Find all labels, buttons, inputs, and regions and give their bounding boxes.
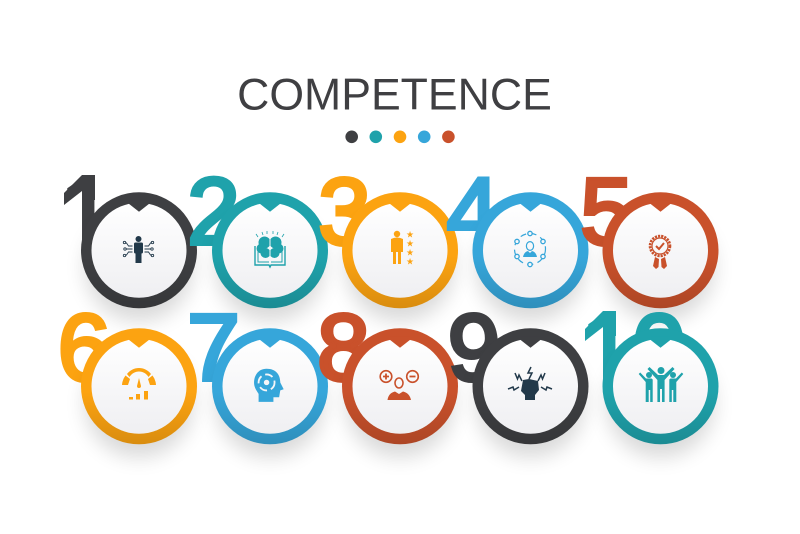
number 1: 1 [60,159,113,265]
icon: gauge [122,368,156,400]
item 10 [581,295,718,457]
number 3: 3 [318,159,371,265]
icon: person with stars: ★ [406,248,414,258]
item 3 [318,159,458,321]
item 8 [317,295,458,457]
ring 1 [81,192,197,321]
ring 4 [472,192,588,321]
item 1 [60,159,197,321]
item 7 [187,295,328,457]
ring 10 [602,328,718,457]
ring 5 [602,192,718,321]
ring 2 [212,192,328,321]
ring 8 [342,328,458,457]
number 8: 8 [317,295,370,401]
title dots [345,130,455,143]
number 6: 6 [58,295,110,401]
icon: network around person [514,231,546,267]
icon: person with stars: ★ [406,238,414,248]
number 10: 1 [581,295,634,401]
title: COMPETENCE [237,70,552,120]
icon: fist with lightning [508,367,552,400]
icon: head with cycle [254,369,284,402]
icon: brain and book [255,231,285,267]
number 4: 4 [447,159,499,265]
item 9 [448,295,588,457]
number 10 [585,311,682,378]
item 5 [580,159,718,321]
ring 3 [342,192,458,321]
number 9: 9 [448,295,500,401]
item 4 [447,159,588,321]
ring 9 [472,328,588,457]
item 2 [187,159,328,321]
icon: person with circuits [123,236,154,263]
icon: person with plus and minus [380,371,418,400]
icon: three people celebrating [639,367,683,402]
number 7: 7 [187,295,240,401]
number 10: 0 [633,295,685,401]
number 1 [64,175,95,240]
number 5: 5 [580,159,633,265]
icon: person with stars: ★ [406,256,414,266]
icon: person with stars: ★ [406,230,414,240]
item 6 [58,295,197,457]
ring 7 [212,328,328,457]
icon: award badge [650,236,670,269]
icon: person with stars [391,230,414,266]
number 2: 2 [187,159,240,265]
ring 6 [81,328,197,457]
